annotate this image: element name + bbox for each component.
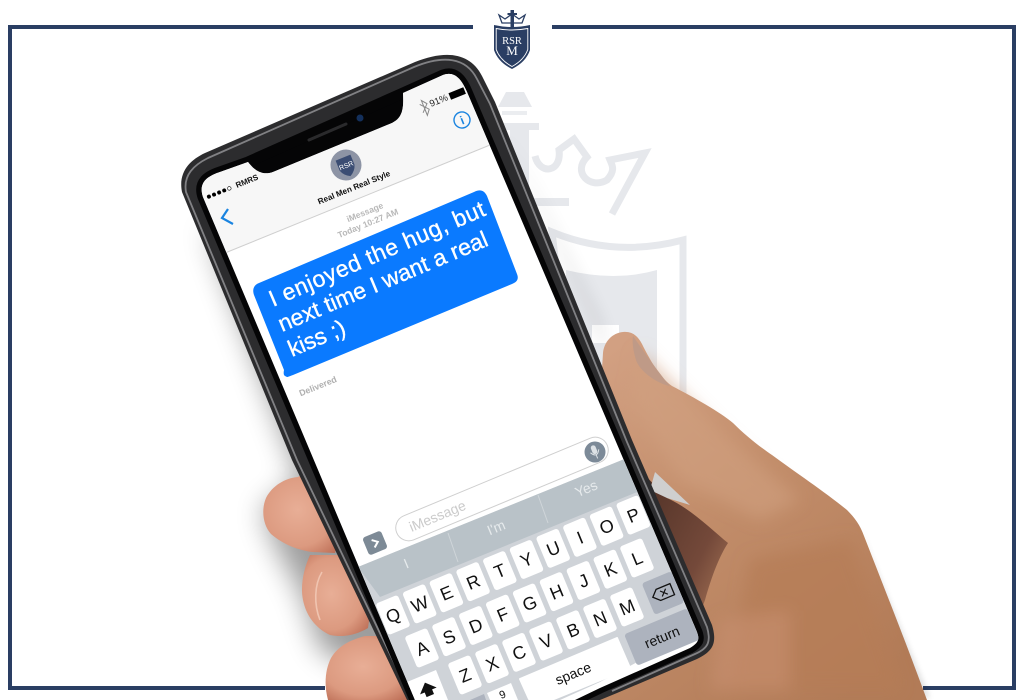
- letter keys: [375, 495, 655, 695]
- letter keys: S: [440, 626, 459, 649]
- letter keys: I: [574, 528, 586, 548]
- letter keys: G: [519, 592, 540, 615]
- phone inner bezel: [202, 74, 698, 700]
- letter keys: N: [590, 607, 610, 631]
- info icon: i: [458, 113, 466, 128]
- number key: [487, 683, 518, 700]
- letter keys: E: [437, 582, 456, 605]
- letter keys: H: [547, 580, 567, 604]
- fingers: [263, 470, 415, 700]
- info icon: [453, 111, 471, 129]
- message text: kiss ;): [284, 314, 349, 362]
- suggestion I: I: [401, 555, 411, 572]
- keyboard base: [358, 458, 697, 700]
- letter keys: C: [509, 641, 529, 665]
- back chevron: [222, 209, 233, 224]
- microphone icon: [584, 442, 606, 462]
- logo: M: [506, 43, 518, 58]
- letter keys: B: [564, 619, 583, 642]
- phone body: [181, 55, 714, 700]
- phone rim highlight: [186, 60, 709, 700]
- letter keys: T: [491, 560, 509, 582]
- letter keys: P: [624, 504, 643, 527]
- thumb nail: [633, 336, 670, 386]
- logo: RSR: [502, 36, 522, 47]
- hand: palm and thumb: [600, 332, 927, 700]
- bluetooth icon: [420, 100, 430, 117]
- grey gap behind thumb: [650, 472, 690, 505]
- letter keys: J: [576, 570, 592, 592]
- notch speaker: [309, 124, 346, 140]
- suggestion I'm: I'm: [485, 516, 508, 538]
- service label: iMessage: [345, 200, 385, 224]
- letter keys: Y: [517, 548, 536, 572]
- letter keys: Q: [383, 604, 404, 627]
- suggestion bar: [358, 458, 642, 597]
- message input pill: iMessage: [407, 497, 468, 535]
- return key: return: [642, 623, 682, 651]
- delivered label: Delivered: [298, 374, 338, 398]
- letter keys: K: [601, 558, 620, 581]
- avatar: [330, 150, 362, 180]
- hand shading: dark web between thumb and palm: [640, 470, 728, 640]
- message text: [265, 195, 492, 362]
- message input pill: [392, 433, 612, 545]
- letter keys: X: [483, 653, 502, 676]
- notch camera: [356, 114, 364, 122]
- letter keys: F: [494, 603, 512, 626]
- message text: next time I want a real: [274, 226, 492, 337]
- letter keys: M: [616, 595, 638, 620]
- letter keys: Z: [456, 664, 474, 687]
- phone: [180, 50, 740, 700]
- finger two: [302, 555, 372, 636]
- watermark crest: [498, 92, 684, 500]
- space key: space: [553, 659, 594, 688]
- phone and hand shadow: [205, 120, 930, 700]
- avatar: RSR: [338, 160, 355, 172]
- letter keys: R: [463, 570, 483, 594]
- letter keys: O: [596, 515, 617, 539]
- carrier label: RMRS: [234, 172, 260, 190]
- expand arrow button: [363, 531, 387, 555]
- return key: [624, 608, 700, 666]
- finger three: [326, 636, 415, 700]
- contact name: Real Men Real Style: [317, 169, 392, 206]
- hand shading: warm patches: [630, 350, 900, 690]
- space key: [520, 638, 630, 699]
- letter keys: V: [537, 630, 556, 653]
- timestamp: Today 10:27 AM: [336, 207, 400, 240]
- message text: I enjoyed the hug, but: [265, 195, 490, 312]
- finger one: [263, 470, 345, 553]
- shift key: [407, 670, 448, 700]
- finger two crease: [316, 572, 322, 620]
- message bubble: [253, 190, 518, 377]
- suggestion dividers: [448, 495, 548, 562]
- letter keys: U: [544, 537, 563, 561]
- letter keys: D: [466, 614, 486, 638]
- signal dots: [206, 186, 232, 199]
- screen: [202, 74, 698, 700]
- header bar: [202, 74, 490, 252]
- letter keys: A: [413, 637, 432, 660]
- backspace key: [642, 571, 684, 615]
- suggestion Yes: Yes: [572, 477, 600, 500]
- battery icon: [448, 87, 466, 100]
- logo: [494, 10, 530, 69]
- letter keys: W: [408, 592, 432, 617]
- battery percentage: 91%: [428, 92, 450, 110]
- globe key: [470, 694, 486, 700]
- letter keys: L: [629, 547, 646, 570]
